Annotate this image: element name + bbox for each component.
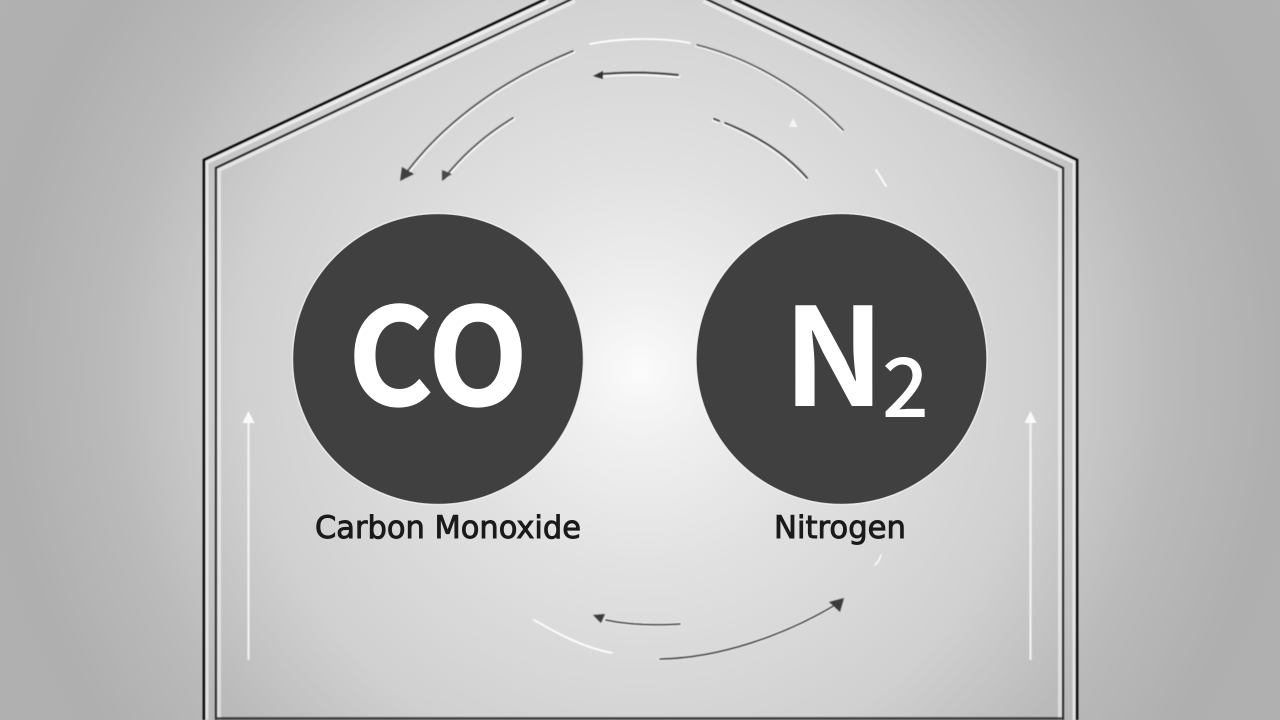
formula: N2: N [783, 249, 885, 446]
circle: CO [292, 214, 584, 504]
formula: N2: 2 [882, 322, 929, 441]
arrow: small bottom arrow [593, 614, 680, 625]
formula: CO: CO [348, 250, 528, 444]
arrow: inner left arc [442, 118, 514, 181]
label: Carbon Monoxide: Carbon Monoxide [315, 510, 581, 546]
top circular arrows [400, 39, 886, 186]
arrow: bottom long arc [660, 598, 844, 659]
highlight: white top arc [590, 39, 690, 44]
molecule: carbon monoxide [292, 214, 584, 546]
highlight: bottom white arc [534, 620, 612, 653]
highlight: white right marks [789, 118, 886, 186]
arrow: outer left arc [400, 51, 574, 181]
arc: outer right segment [696, 45, 843, 131]
circle: N2 [696, 214, 987, 504]
arrow: left vertical white [242, 411, 254, 660]
arc: inner right segment [713, 119, 807, 179]
bottom circular arrows [534, 555, 881, 659]
house outline: double line frame [204, 0, 1077, 720]
arrow: small top arrow [593, 71, 678, 79]
highlight: white hook below Nitrogen [875, 555, 881, 565]
label: Nitrogen: Nitrogen [774, 510, 906, 546]
arrow: right vertical white [1024, 411, 1036, 660]
molecule: nitrogen [696, 214, 987, 546]
